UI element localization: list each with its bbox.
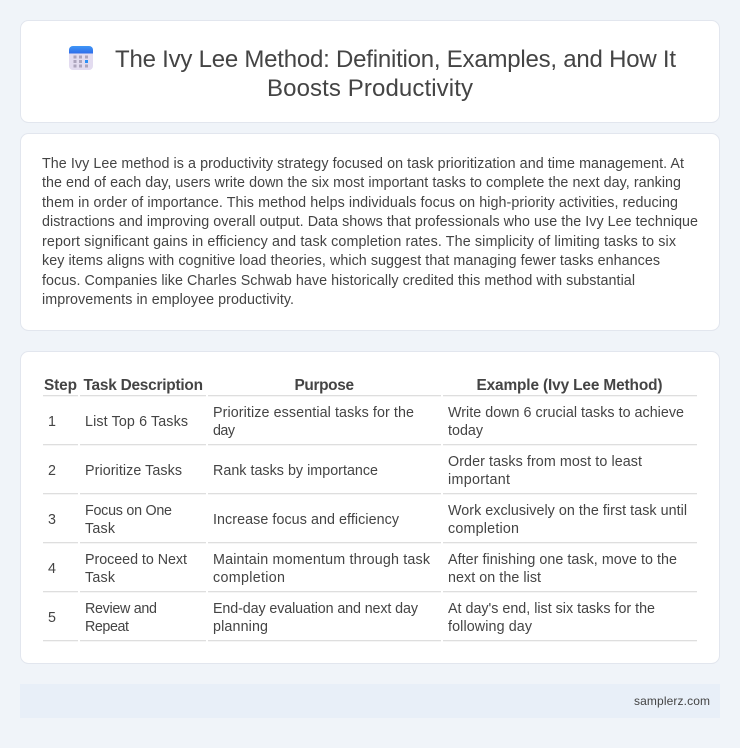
title (115, 46, 676, 102)
text block: summary paragraph: improvements in employee productivity. (42, 292, 294, 308)
text block: summary paragraph: the end of each day, users write down the six most important tasks to complete the next day, ranking (42, 175, 681, 191)
table row: step 5: Review and (85, 601, 157, 617)
panel: header (20, 20, 720, 122)
table row: step 5: following day (448, 619, 533, 635)
text block: summary paragraph: report significant gains in efficiency and task completion rates. The simplicity of limiting tasks to six (42, 234, 676, 250)
table row: step 1: day (213, 423, 236, 439)
table row: step 4: Proceed to Next (85, 552, 187, 568)
text block: summary paragraph: distractions and improving overall output. Data shows that professionals who use the Ivy Lee technique (42, 214, 698, 230)
table row: step 4: completion (213, 570, 285, 586)
table row: step 3: Task (85, 521, 116, 537)
table row: step 4: After finishing one task, move to the (448, 552, 677, 568)
footer source text: samplerz.com (634, 694, 710, 708)
table row: step 2: 2 (48, 463, 56, 479)
table row: step 5: At day's end, list six tasks for the (448, 601, 655, 617)
table row: step 2: important (448, 472, 510, 488)
table row: step 5: planning (213, 619, 268, 635)
table row: step 5: End-day evaluation and next day (213, 601, 419, 617)
table header row: Purpose (294, 377, 354, 394)
table row: step 5: Repeat (85, 619, 129, 635)
table row: step 2: Order tasks from most to least (448, 454, 642, 470)
table row: step 3: Increase focus and efficiency (213, 512, 400, 528)
panel: steps table (20, 352, 720, 664)
table row: step 4: Maintain momentum through task (213, 552, 431, 568)
table row: step 4: Task (85, 570, 116, 586)
table header row (43, 377, 697, 396)
title: The Ivy Lee Method: Definition, Examples, and How It (115, 46, 676, 73)
table row: step 1: 1 (48, 414, 56, 430)
table row: step 1: Write down 6 crucial tasks to achieve (448, 405, 684, 421)
text block: summary paragraph: focus. Companies like Charles Schwab have historically credited this method with substantial (42, 273, 635, 289)
panel: description (20, 134, 720, 330)
text block: summary paragraph (42, 156, 698, 308)
table row: step 5 (43, 601, 697, 641)
table header row: Example (Ivy Lee Method) (476, 377, 662, 394)
table row: step 3: 3 (48, 512, 56, 528)
table header row: Step (44, 377, 77, 394)
text block: summary paragraph: them in order of importance. This method helps individuals focus on high-priority activities, reducing (42, 195, 678, 211)
icon: calendar (69, 46, 93, 70)
table row: step 3: completion (448, 521, 519, 537)
table row: step 4: next on the list (448, 570, 541, 586)
table row: step 1: Prioritize essential tasks for the (213, 405, 414, 421)
title: Boosts Productivity (267, 75, 473, 102)
table row: step 3 (43, 503, 697, 543)
table row: step 1: List Top 6 Tasks (85, 414, 188, 430)
table row: step 3: Focus on One (85, 503, 172, 519)
table row: step 1: today (448, 423, 484, 439)
table row: step 2 (43, 454, 697, 494)
table row: step 4: 4 (48, 561, 56, 577)
table row: step 3: Work exclusively on the first task until (448, 503, 687, 519)
table row: step 1 (43, 405, 697, 445)
table row: step 4 (43, 552, 697, 592)
table header row: Task Description (84, 377, 203, 394)
table row: step 2: Prioritize Tasks (85, 463, 182, 479)
table row: step 2: Rank tasks by importance (213, 463, 378, 479)
footer (20, 684, 720, 718)
text block: summary paragraph: key items aligns with cognitive load theories, which suggest that managing fewer tasks enhances (42, 253, 660, 269)
text block: summary paragraph: The Ivy Lee method is a productivity strategy focused on task prioritization and time management. At (42, 156, 684, 172)
table row: step 5: 5 (48, 610, 56, 626)
